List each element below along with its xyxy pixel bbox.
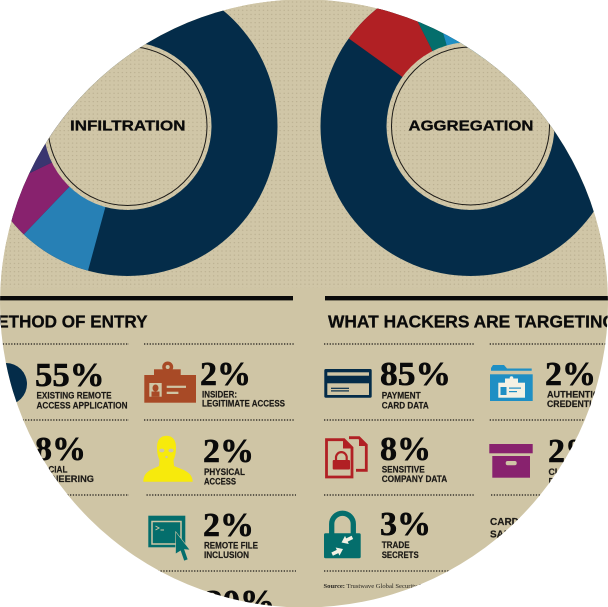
item: 2% remote file inclusion — [148, 514, 258, 560]
panel: what hackers are targeting — [324, 296, 608, 590]
item: 85% payment card data: PAYMENT — [382, 391, 421, 401]
item: 8% social engineering: 8% — [35, 431, 86, 468]
item: card sales note: SALES — [490, 530, 524, 541]
segment: teal — [418, 22, 446, 51]
item: 85% payment card data — [324, 362, 448, 409]
heading rule — [0, 296, 293, 300]
icon: masked figure — [143, 436, 193, 482]
donut chart: aggregation — [320, 8, 594, 276]
icon: archive box — [489, 444, 533, 478]
icon: padlock — [324, 513, 361, 558]
item: 2% insider: LEGITIMATE ACCESS — [202, 399, 285, 409]
icon: ID badge — [144, 362, 196, 403]
item: 55% existing remote access: EXISTING REMOTE — [36, 391, 112, 401]
icon: navy circle — [6, 363, 27, 402]
segment: navy 85% — [320, 0, 608, 276]
centre ring — [48, 46, 207, 206]
donut chart: infiltration — [12, 10, 278, 276]
dotted texture band — [0, 0, 608, 288]
item: 2% physical access — [143, 433, 254, 487]
item: 2% remote file inclusion: 2% — [203, 507, 254, 544]
item: 85% payment card data: CARD DATA — [382, 400, 429, 410]
item: 8% social engineering: ENGINEERING — [29, 474, 94, 484]
item: 2% authentication credentials — [490, 356, 608, 409]
item: 2% customer data: 2% — [548, 433, 599, 470]
segment: navy 55% — [0, 0, 278, 276]
item: 2% authentication credentials: CREDENTIALS — [547, 399, 608, 409]
item: card sales note: CARDHOLDER — [490, 517, 562, 528]
segment: blue — [24, 186, 106, 271]
item: 8% sensitive company data: COMPANY DATA — [382, 474, 448, 484]
segment: purple — [12, 162, 70, 234]
item: 55% existing remote access — [6, 363, 128, 409]
segment: light blue — [443, 33, 484, 59]
item: 2% physical access: 2% — [203, 433, 254, 470]
label: aggregation: AGGREGATION — [408, 118, 534, 134]
centre circle — [44, 42, 212, 210]
panel: method of entry — [0, 296, 296, 607]
item: 2% customer data: CUSTOMER — [548, 467, 599, 477]
icon: terminal with cursor — [148, 516, 190, 561]
item: 8% social engineering: SOCIAL — [36, 465, 68, 475]
item: 3% trade secrets — [324, 510, 428, 558]
item: 55% existing remote access: 55% — [35, 357, 104, 394]
item: 2% insider — [144, 362, 285, 407]
icon: payment card — [324, 369, 372, 398]
item: 2% customer data: DATA — [548, 477, 572, 487]
item: 2% insider: INSIDER: — [202, 389, 237, 399]
item: 2% authentication credentials: 2% — [545, 356, 596, 393]
icon: credentials folder — [490, 365, 533, 401]
item: 3% trade secrets: 3% — [380, 506, 431, 543]
segment: indigo — [29, 106, 72, 174]
item: 2% remote file inclusion: REMOTE FILE — [204, 540, 258, 550]
centre ring — [392, 47, 550, 205]
item: 8% sensitive company data: SENSITIVE — [382, 465, 425, 475]
item: 2% remote file inclusion: INCLUSION — [204, 550, 249, 560]
item: 2% customer data — [489, 433, 599, 487]
icon: locked documents — [326, 438, 366, 477]
item: 8% social engineering — [36, 438, 94, 482]
item: 3% trade secrets: SECRETS — [382, 550, 419, 560]
item: 3% trade secrets: TRADE — [382, 540, 410, 550]
source line: Source: Trustwave Global Security Report — [324, 583, 437, 590]
label: infiltration: INFILTRATION — [70, 118, 186, 134]
item: 2% physical access: PHYSICAL — [204, 467, 246, 477]
item: 2% insider: 2% — [200, 356, 251, 393]
item: 2% physical access: ACCESS — [204, 477, 236, 487]
heading rule — [325, 296, 608, 300]
item: 55% existing remote access: ACCESS APPLICATION — [36, 400, 128, 410]
segment: red — [348, 8, 432, 77]
item: 8% sensitive company data — [325, 436, 447, 482]
centre circle — [386, 42, 554, 210]
item: 8% sensitive company data: 8% — [380, 431, 431, 468]
item: card sales note — [490, 517, 562, 541]
item: 85% payment card data: 85% — [380, 356, 451, 393]
